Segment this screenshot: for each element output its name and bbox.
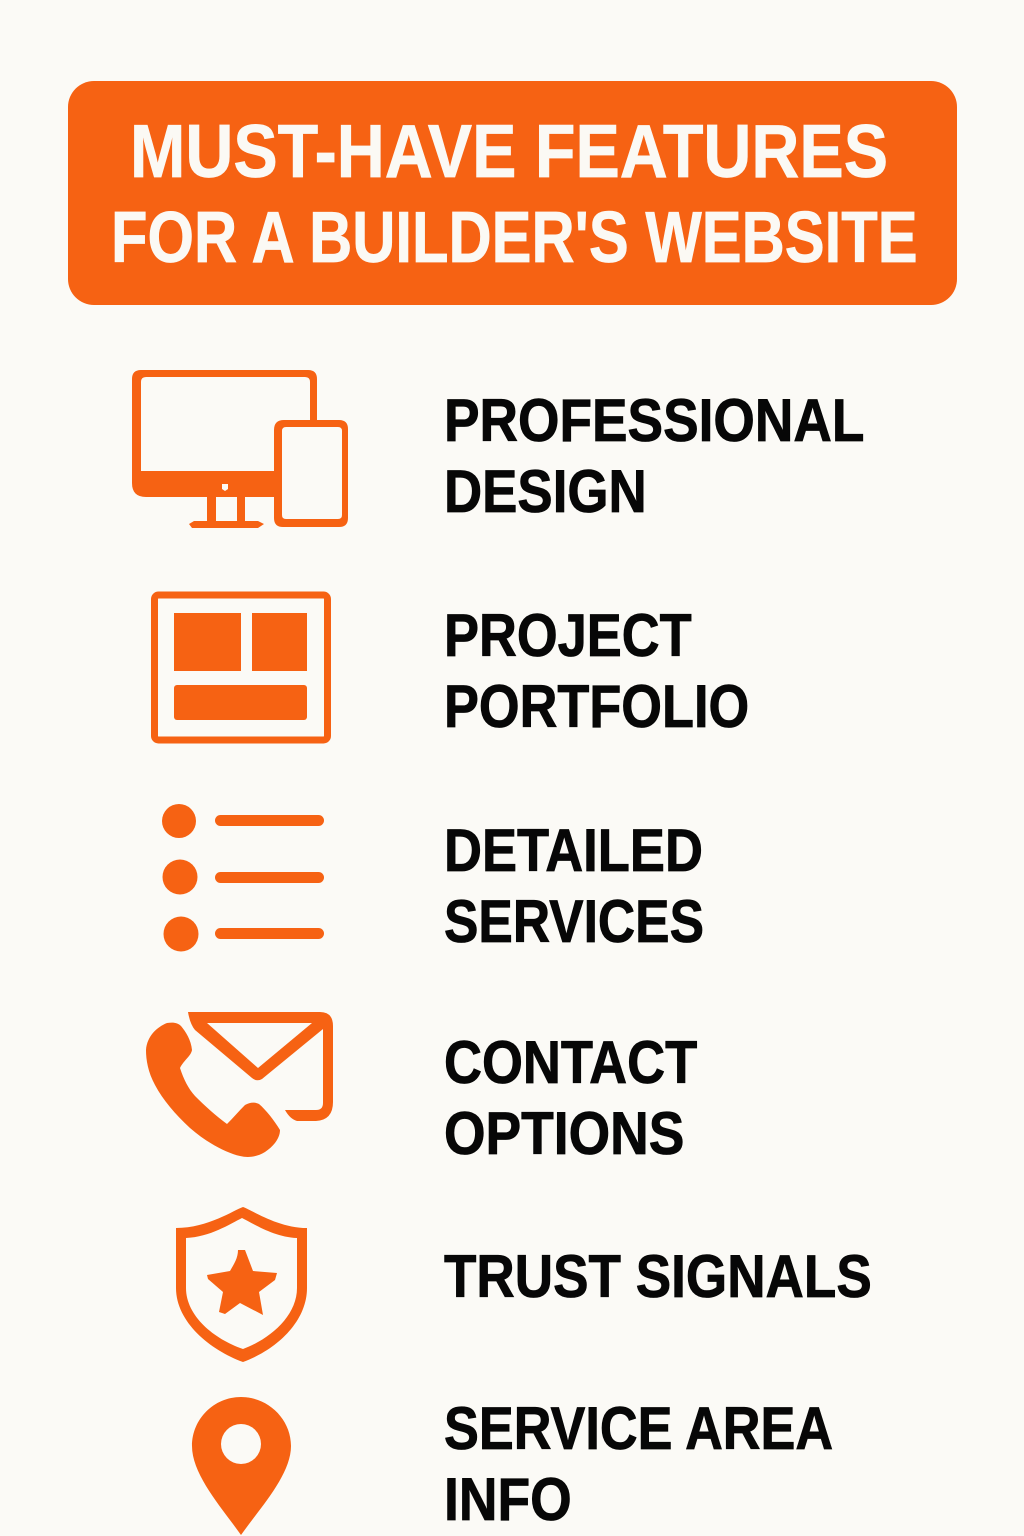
- title line 2: FOR A BUILDER'S WEBSITE: [111, 198, 918, 278]
- label: detailed services: DETAILED: [444, 817, 703, 884]
- title line 1: MUST-HAVE FEATURES: [130, 109, 888, 193]
- label: professional design: [444, 387, 864, 525]
- icon: services list: [162, 804, 324, 952]
- title banner: [68, 81, 957, 305]
- label: project portfolio: [444, 602, 749, 740]
- label: service area info: INFO: [444, 1466, 572, 1533]
- label: trust signals: TRUST SIGNALS: [444, 1243, 872, 1310]
- icon: map pin: [192, 1397, 291, 1535]
- label: service area info: [444, 1395, 833, 1533]
- label: project portfolio: PROJECT: [444, 602, 692, 669]
- label: contact options: OPTIONS: [444, 1100, 684, 1167]
- icon: monitor and tablet: [132, 370, 348, 528]
- label: service area info: SERVICE AREA: [444, 1395, 833, 1462]
- label: professional design: DESIGN: [444, 458, 647, 525]
- icon: shield with star: [176, 1207, 307, 1362]
- label: professional design: PROFESSIONAL: [444, 387, 864, 454]
- label: detailed services: SERVICES: [444, 888, 704, 955]
- label: contact options: CONTACT: [444, 1029, 697, 1096]
- label: project portfolio: PORTFOLIO: [444, 673, 749, 740]
- label: contact options: [444, 1029, 698, 1167]
- icon: phone and envelope: [146, 1012, 333, 1157]
- label: detailed services: [444, 817, 704, 955]
- icon: portfolio grid: [154, 595, 328, 740]
